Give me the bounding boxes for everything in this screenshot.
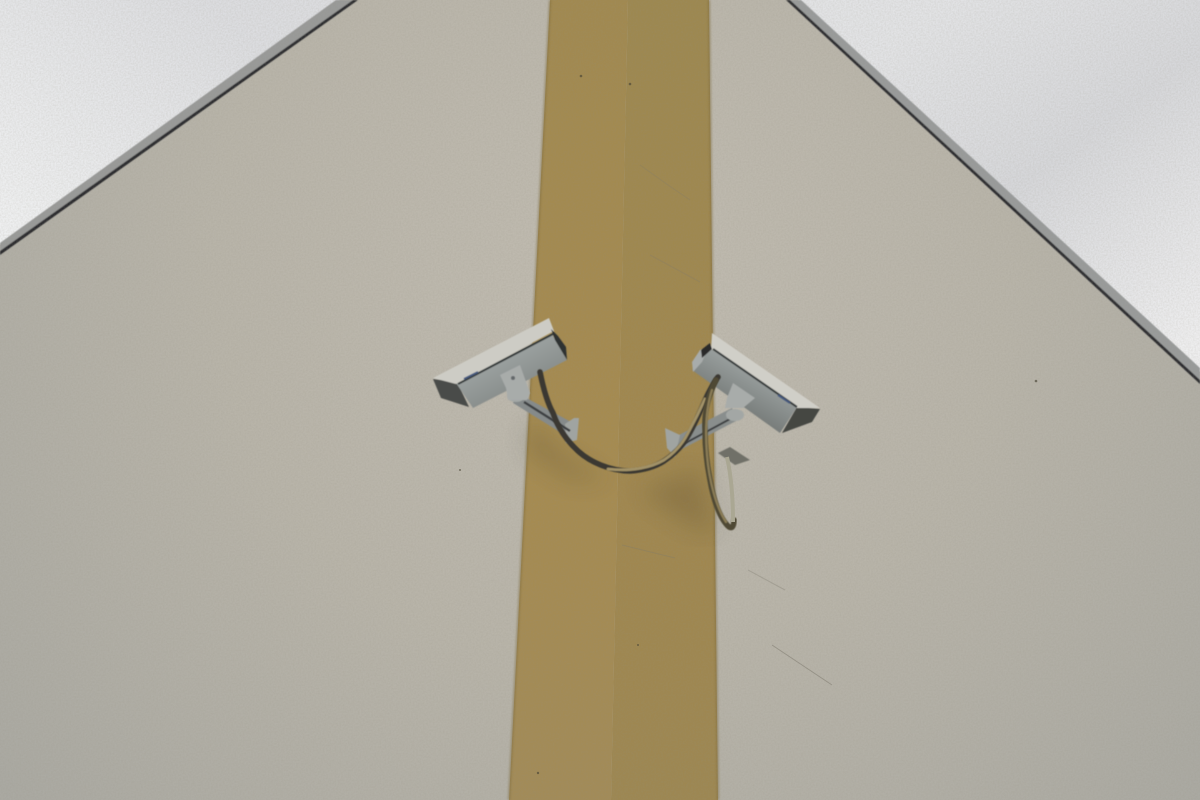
right camera body xyxy=(692,347,797,433)
sky: right xyxy=(798,0,1200,372)
strip edges xyxy=(509,0,718,800)
right camera mount xyxy=(725,383,755,408)
right bracket arm xyxy=(665,408,744,457)
wall cracks and marks xyxy=(622,165,832,685)
left camera body xyxy=(456,334,567,408)
cable: connecting loop between cameras xyxy=(540,372,718,471)
wall specks xyxy=(459,75,1037,774)
ochre strip: right face xyxy=(611,0,718,800)
right camera rear end xyxy=(692,346,709,372)
right wall plate for cable xyxy=(718,447,750,465)
right camera brand label xyxy=(778,395,790,403)
cable: thin lead to wall plate xyxy=(727,457,733,522)
left camera top plate xyxy=(433,318,554,384)
right camera top plate xyxy=(711,333,820,408)
cable: downward loop xyxy=(705,380,734,528)
camera shadows on wall xyxy=(525,420,716,535)
left camera brand label xyxy=(464,372,478,379)
wall: right face xyxy=(707,0,1200,800)
roof trim: left xyxy=(0,0,358,255)
left camera mount xyxy=(500,365,530,400)
left bracket arm xyxy=(507,390,579,443)
left camera rear end xyxy=(551,329,567,360)
right camera front hood xyxy=(782,407,820,433)
wall: left face xyxy=(0,0,552,800)
sky: left xyxy=(0,0,340,245)
ochre strip: left face xyxy=(509,0,628,800)
roof trim: right xyxy=(786,0,1200,384)
left camera assembly xyxy=(433,318,579,443)
right camera assembly xyxy=(665,333,820,465)
left camera front hood xyxy=(433,379,469,407)
